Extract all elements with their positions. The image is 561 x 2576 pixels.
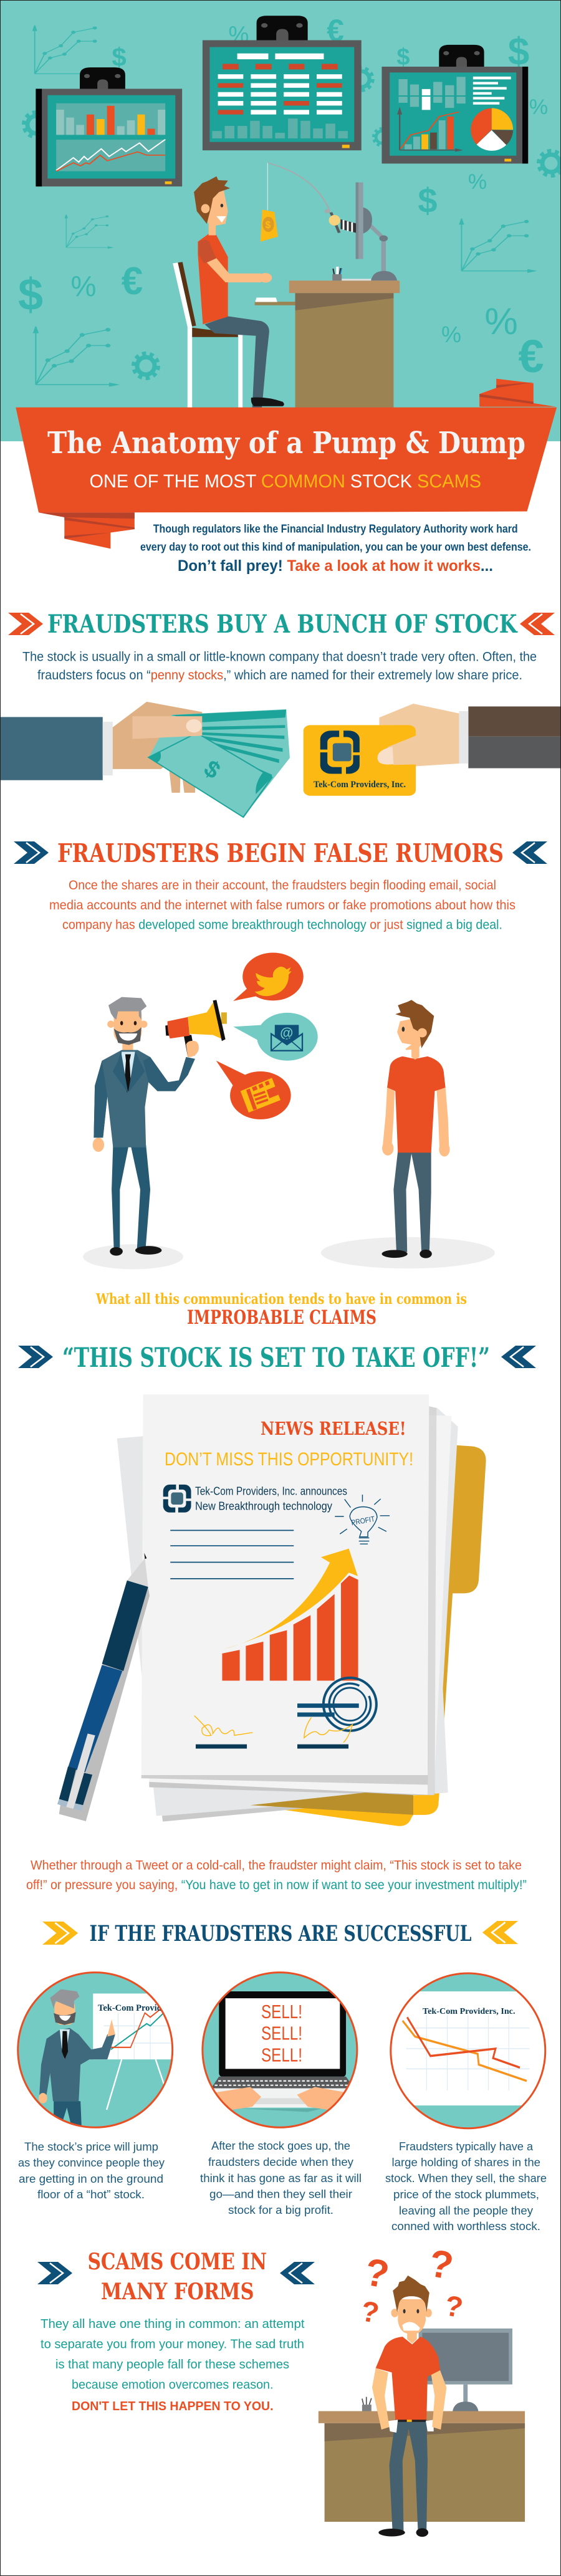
body text: scams warning: is that many people fall for these schemes [55,2358,289,2372]
body text: scams warning [41,2317,305,2413]
background currency symbols: % [441,322,461,347]
hero illustration panel [0,0,561,441]
text rules [170,1530,294,1579]
seal and signatures [194,1678,376,1749]
background currency symbols: % [484,300,518,342]
section heading: scams come in many forms: SCAMS COME IN [88,2249,267,2275]
chevron right [520,613,555,635]
background currency symbols: % [529,95,548,119]
body text: pressure claims: Whether through a Tweet or a cold-call, the fraudster might claim, “This stock is set to take [31,1859,522,1872]
background currency symbols [18,13,561,382]
ribbon folds [39,379,557,548]
bulb word: PROFIT [350,1515,376,1527]
desk and monitor [319,2329,525,2522]
background line chart icons [33,26,535,386]
intro text block [140,522,531,575]
background currency symbols: $ [18,270,43,320]
question marks: ? [362,2251,392,2297]
body text: penny stocks [22,650,537,682]
speech bubble: email: @ [280,1025,293,1040]
caption column 3: large holding of shares in the [391,2157,540,2169]
body text: penny stocks: fraudsters focus on “penny stocks,” which are named for their extremely low share price. [37,668,522,682]
document announcement: Tek-Com Providers, Inc. announces [195,1485,347,1497]
body text: scams warning: to separate you from your money. The sad truth [41,2338,304,2352]
circle 3: falling price chart [386,1973,547,2128]
chevron right [501,1346,536,1368]
body text: false rumors: media accounts and the internet with false rumors or fake promotions about how this [49,898,515,912]
cash dollar sign: $ [199,755,225,784]
illustration: hands exchanging cash and stock card [0,702,561,817]
caption column 3: Fraudsters typically have a [399,2140,534,2153]
body text: pressure claims: off!” or pressure you saying, “You have to get in now if want to see your investment multiply!” [26,1878,527,1892]
background currency symbols: € [327,13,344,48]
caption column 3 [385,2140,547,2233]
document announcement: New Breakthrough technology [195,1500,332,1513]
caption column 1: floor of a “hot” stock. [37,2188,145,2201]
chair [173,262,242,408]
caption column 2: stock for a big profit. [228,2204,333,2216]
circle 2 sell text: SELL! [261,2044,302,2066]
caption column 2: go—and then they sell their [209,2188,352,2201]
section heading: scams come in many forms: MANY FORMS [101,2279,254,2305]
subtitle: ONE OF THE MOST COMMON STOCK SCAMS [90,471,481,492]
logo [161,1483,193,1514]
folder [251,1445,486,1826]
speech bubble: email [233,1013,318,1061]
intro text block: Don’t fall prey! Take a look at how it works... [178,557,493,575]
card company name: Tek-Com Providers, Inc. [314,780,406,790]
speech bubble: news [216,1061,291,1119]
body text: pressure claims [26,1859,527,1892]
background currency symbols: % [468,170,487,194]
background currency symbols: % [229,22,249,47]
caption column 2: After the stock goes up, the [211,2140,350,2152]
document headline: NEWS RELEASE! [261,1418,406,1439]
left hand with cash [0,702,290,817]
man with empty pockets [372,2276,446,2537]
left shoe [251,397,284,406]
caption column 3: price of the stock plummets, [393,2188,539,2201]
chevron right [512,841,547,864]
question marks: ? [426,2242,456,2288]
rising bar chart and arrow [222,1549,358,1680]
callout: improbable claims: IMPROBABLE CLAIMS [187,1306,376,1329]
circle 3 company name: Tek-Com Providers, Inc. [423,2007,515,2016]
chevron left [42,1922,78,1945]
background currency symbols: % [71,270,96,302]
paper sheets [117,1394,458,1822]
body text: scams warning: because emotion overcomes reason. [72,2378,273,2392]
chevron right [482,1921,518,1944]
body text: penny stocks: The stock is usually in a small or little-known company that doesn’t trade very often. Often, the [22,650,537,664]
question marks: ? [358,2294,381,2329]
illustration: confused man with empty pockets at desk [319,2242,525,2537]
body text: false rumors: company has developed some breakthrough technology or just signed a big deal. [62,918,502,932]
caption column 2: think it has gone as far as it will [200,2172,362,2185]
monitor: center data table [203,16,362,150]
background currency symbols: $ [112,42,127,72]
dollar sign on bait: $ [266,220,271,231]
listening man in orange shirt [381,1000,450,1258]
caption column 1: are getting in on the ground [19,2173,163,2185]
company logo [320,730,360,774]
megaphone [165,1000,227,1057]
desk with pencil cup and keyboard tray [255,267,400,408]
callout: improbable claims [95,1291,467,1329]
body text: scams warning: They all have one thing in common: an attempt [41,2317,305,2331]
caption column 2 [200,2140,362,2216]
question marks [358,2242,466,2329]
callout: improbable claims: What all this communication tends to have in common is [95,1291,467,1308]
pen [57,1553,150,1821]
caption column 3: conned with worthless stock. [391,2220,540,2233]
body text: scams warning: DON'T LET THIS HAPPEN TO YOU. [72,2400,273,2413]
illustration: promoter with megaphone and listening man [83,952,495,1269]
question marks: ? [443,2289,466,2324]
background currency symbols: $ [508,31,529,74]
right hand with company card [304,704,561,796]
background currency symbols: € [122,260,143,303]
idea light bulb [335,1495,390,1544]
man seated at desk [194,176,272,408]
speech bubble: twitter [233,952,304,1001]
chevron left [8,613,43,635]
fishing rod from desktop monitor with hand and dollar bait [261,163,397,280]
circle 2 sell text: SELL! [261,2022,302,2044]
chevron left [37,2262,72,2284]
caption column 1: The stock’s price will jump [24,2141,158,2153]
circle illustrations [18,1973,547,2128]
background currency symbols: $ [396,44,410,70]
title ribbon banner [16,379,557,548]
document announcement [195,1485,347,1513]
chevron left [18,1346,53,1368]
circle 1 company name: Tek-Com Providers, Inc. [98,2003,193,2013]
illustration: news release document stack with folder and pen [57,1394,486,1826]
ground shadows [83,1237,495,1269]
suited promoter [93,997,195,1256]
caption column 1 [18,2141,165,2201]
background currency symbols: € [518,330,544,382]
section heading: scams come in many forms [37,2249,315,2305]
chevron left [14,841,49,864]
circle 2 sell text [261,2001,302,2066]
monitor: right mixed charts and pie [381,45,528,163]
circle 2: laptop SELL screen [203,1973,357,2127]
chevron right [280,2262,315,2284]
intro text block: Though regulators like the Financial Industry Regulatory Authority work hard [153,522,518,535]
document subheadline: DON’T MISS THIS OPPORTUNITY! [165,1449,413,1470]
caption column 3: stock. When they sell, the share [385,2172,547,2185]
circle 1: promoter at chart [18,1973,173,2127]
body text: false rumors: Once the shares are in their account, the fraudsters begin flooding email, social [69,878,496,893]
caption column 2: fraudsters decide when they [208,2156,353,2168]
monitor: left bar and line charts [36,67,182,186]
caption column 3: leaving all the people they [399,2205,533,2217]
circle 2 sell text: SELL! [261,2001,302,2023]
background currency symbols: $ [418,181,438,220]
body text: false rumors [49,878,515,932]
caption column 1: as they convince people they [18,2157,165,2169]
